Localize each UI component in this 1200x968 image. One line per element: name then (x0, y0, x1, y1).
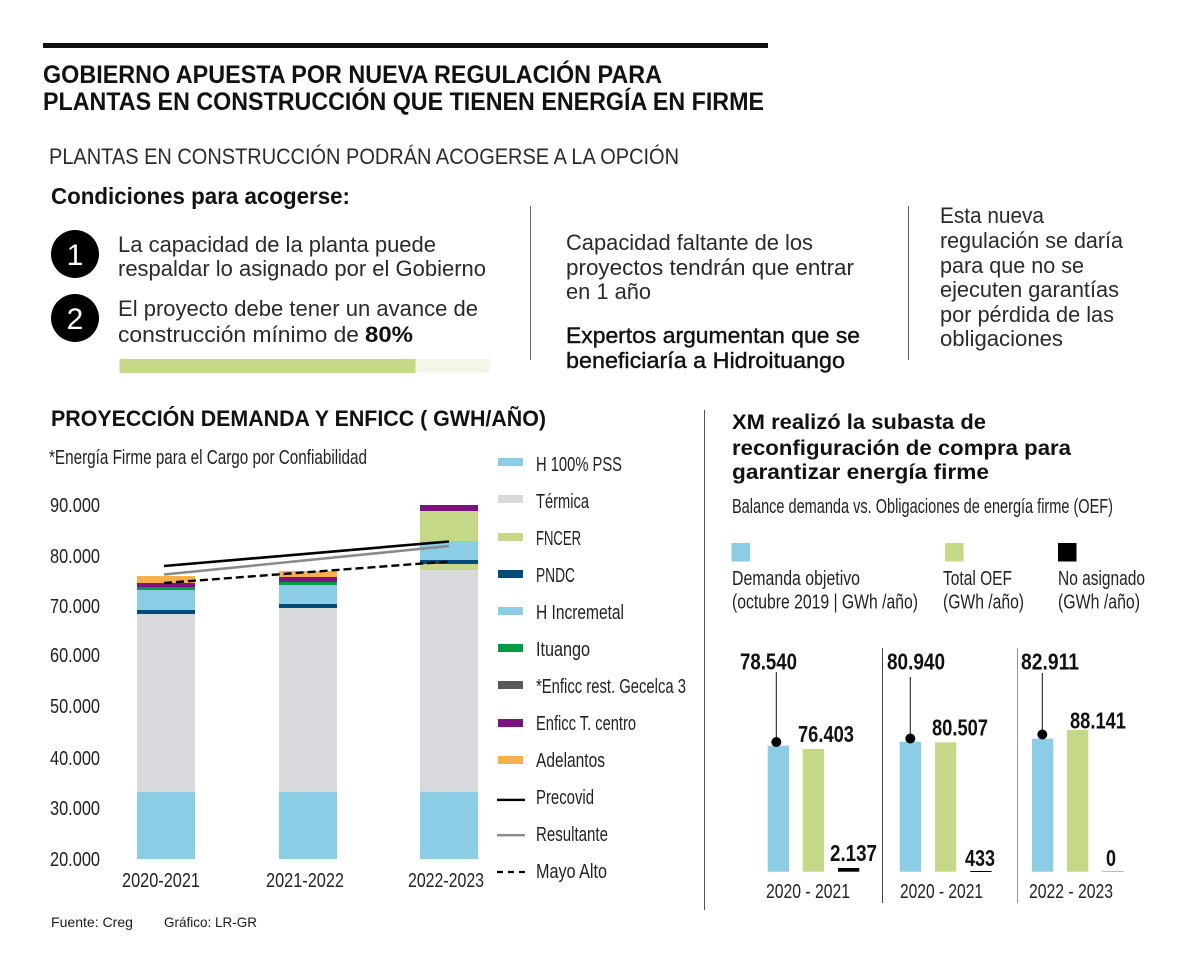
group 2020 - 2021 second: 2020 - 2021 (900, 881, 983, 903)
text block: capacity (566, 230, 854, 304)
legend: projection chart: H Incremetal (536, 602, 624, 624)
legend: projection chart: Adelantos (536, 750, 605, 772)
text block: experts: beneficiaría a Hidroituango (566, 348, 845, 373)
legend: projection chart: Enficc T. centro (536, 713, 636, 735)
legend: projection chart: Mayo Alto (536, 861, 607, 883)
top rule (43, 43, 768, 48)
legend: projection chart: Ituango (536, 639, 590, 661)
legend: projection chart: Térmica (536, 491, 590, 513)
group 2020 - 2021 second: 80.507 (932, 714, 988, 740)
legend: projection chart: PNDC (536, 565, 575, 587)
text block: capacity: proyectos tendrán que entrar (566, 255, 854, 280)
group 2020 - 2021: 2.137 (830, 840, 877, 866)
group 2020 - 2021: 76.403 (798, 721, 854, 747)
source: Gráfico: LR-GR (164, 914, 257, 930)
x axis labels (122, 870, 484, 892)
group 2022 - 2023: 2022 - 2023 (1029, 881, 1113, 903)
y axis labels (50, 495, 100, 871)
condition 2 (51, 294, 478, 347)
y axis labels: 30.000 (50, 798, 100, 820)
heading: XM auction: garantizar energía firme (732, 460, 989, 484)
bar 2022-2023 (420, 505, 478, 859)
y axis labels: 70.000 (50, 596, 100, 618)
legend: balance chart: Demanda objetivo (732, 568, 860, 590)
group 2022 - 2023: 82.911 (1021, 648, 1079, 674)
legend: projection chart: H 100% PSS (536, 454, 622, 476)
group 2022 - 2023: 88.141 (1070, 708, 1126, 734)
condition 1: La capacidad de la planta puede (118, 232, 436, 257)
line: Precovid (164, 542, 449, 566)
heading: XM auction: XM realizó la subasta de (732, 410, 986, 434)
subtitle: PLANTAS EN CONSTRUCCIÓN PODRÁN ACOGERSE A LA OPCIÓN (49, 144, 679, 169)
group 2020 - 2021 second: 80.940 (887, 648, 945, 674)
condition 1 (51, 230, 486, 281)
legend: balance chart: (GWh /año) (943, 592, 1024, 614)
title: GOBIERNO APUESTA POR NUEVA REGULACIÓN PARA (43, 59, 662, 89)
condition 1: respaldar lo asignado por el Gobierno (118, 256, 486, 281)
legend: balance chart (732, 543, 1145, 614)
text block: regulation: regulación se daría (940, 228, 1124, 253)
legend: projection chart: Precovid (536, 787, 594, 809)
x axis labels: 2022-2023 (408, 870, 484, 892)
group 2020 - 2021 second: 433 (965, 845, 995, 871)
bar 2020-2021 (137, 576, 195, 859)
line: Resultante (164, 546, 449, 574)
legend: projection chart: Resultante (536, 824, 608, 846)
group 2022 - 2023: 0 (1106, 845, 1116, 871)
y axis labels: 80.000 (50, 546, 100, 568)
heading: conditions: Condiciones para acogerse: (51, 183, 350, 209)
x axis labels: 2020-2021 (122, 870, 200, 892)
title (43, 59, 764, 116)
condition 1: 1 (67, 239, 83, 272)
line: Mayo Alto (164, 562, 449, 583)
group 2020 - 2021 (740, 648, 877, 903)
y axis labels: 50.000 (50, 696, 100, 718)
note: *Energía Firme para el Cargo por Confiabilidad (49, 447, 367, 469)
panel: conditions (51, 230, 490, 373)
condition 2: construcción mínimo de (118, 322, 359, 347)
text block: regulation: ejecuten garantías (940, 277, 1119, 302)
legend: balance chart: (GWh /año) (1058, 592, 1140, 614)
balance chart (740, 648, 1126, 903)
heading: XM auction: reconfiguración de compra para (732, 436, 1072, 460)
text block: regulation: obligaciones (940, 326, 1063, 351)
text block: regulation: para que no se (940, 253, 1084, 278)
progress bar 80% (120, 359, 490, 373)
condition 2: El proyecto debe tener un avance de (118, 296, 478, 321)
group 2020 - 2021: 78.540 (740, 648, 797, 674)
condition 2: 80% (365, 322, 413, 347)
text block: experts (566, 323, 860, 373)
text block: experts: Expertos argumentan que se (566, 323, 860, 348)
x axis labels: 2021-2022 (266, 870, 344, 892)
text block: capacity: en 1 año (566, 279, 651, 304)
text block: regulation (940, 203, 1124, 351)
condition 2: 2 (67, 303, 83, 336)
legend: balance chart: No asignado (1058, 568, 1145, 590)
legend: balance chart: Total OEF (943, 568, 1012, 590)
source (51, 914, 257, 930)
bar 2021-2022 (279, 571, 337, 859)
y axis labels: 40.000 (50, 748, 100, 770)
legend: balance chart: (octubre 2019 | GWh /año) (732, 592, 918, 614)
stacked bar chart (50, 495, 484, 892)
group 2020 - 2021: 2020 - 2021 (766, 881, 850, 903)
text block: regulation: por pérdida de las (940, 302, 1114, 327)
text block: regulation: Esta nueva (940, 203, 1045, 228)
legend: projection chart: FNCER (536, 528, 581, 550)
y axis labels: 90.000 (50, 495, 100, 517)
group 2022 - 2023 (1021, 648, 1126, 903)
source: Fuente: Creg (51, 914, 133, 930)
text block: capacity: Capacidad faltante de los (566, 230, 813, 255)
heading: projection chart: PROYECCIÓN DEMANDA Y ENFICC ( GWH/AÑO) (51, 406, 546, 431)
legend: projection chart (497, 454, 686, 883)
legend: projection chart: *Enficc rest. Gecelca 3 (536, 676, 686, 698)
group 2020 - 2021 second (887, 648, 995, 903)
y axis labels: 60.000 (50, 645, 100, 667)
heading: XM auction (732, 410, 1072, 484)
y axis labels: 20.000 (50, 849, 100, 871)
title: PLANTAS EN CONSTRUCCIÓN QUE TIENEN ENERGÍA EN FIRME (43, 86, 764, 116)
